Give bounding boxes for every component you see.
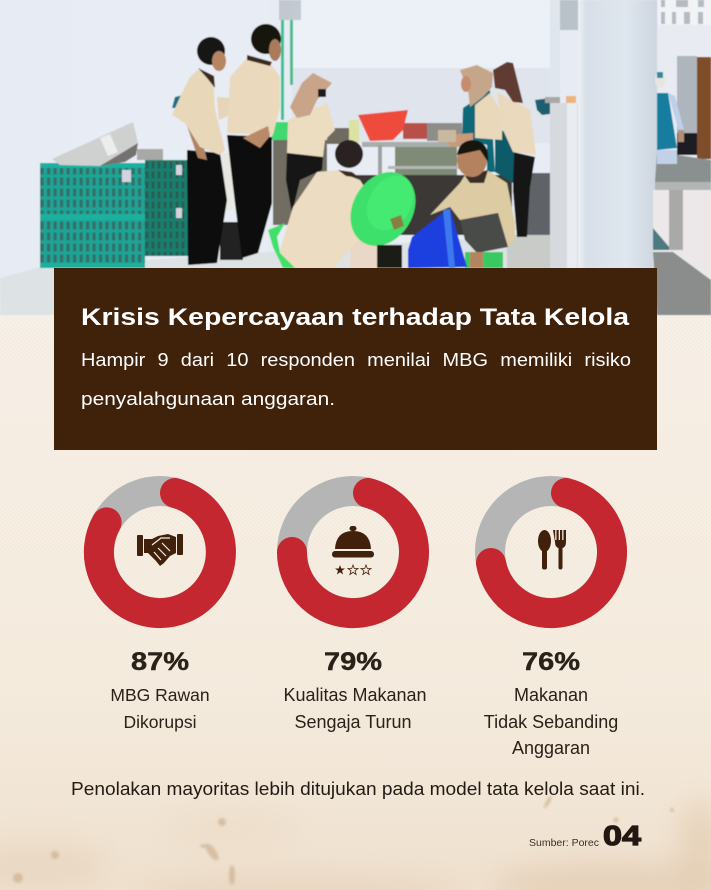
woman 1 — [286, 73, 335, 213]
green bowl behind — [272, 122, 289, 140]
photo: kitchen workers washing equipment — [0, 0, 711, 315]
donut: 87% — [99, 491, 221, 613]
panel description — [81, 350, 631, 409]
donut: 76% — [490, 491, 612, 613]
crouching man right — [430, 140, 515, 268]
sink — [327, 110, 463, 185]
stat: 76%: 76% — [522, 648, 580, 676]
teal cap — [172, 95, 183, 108]
stat: 76%: Anggaran — [512, 738, 590, 758]
metal basin — [52, 122, 163, 166]
paper background — [0, 300, 711, 890]
person behind — [217, 97, 243, 260]
green basin small — [268, 223, 295, 268]
stat: 87%: Dikorupsi — [124, 712, 196, 732]
teal bag on hook — [535, 98, 550, 115]
closing statement: Penolakan mayoritas lebih ditujukan pada model tata kelola saat ini. — [71, 779, 645, 799]
crates — [40, 160, 191, 268]
stat: 76%: Tidak Sebanding — [484, 712, 618, 732]
photo background walls and floor — [0, 0, 711, 315]
header panel — [54, 268, 657, 450]
bucket — [377, 245, 402, 268]
woman 2 — [438, 65, 502, 172]
icon: handshake — [137, 534, 183, 566]
stat: 87%: MBG Rawan — [110, 685, 210, 705]
stat: 79%: Kualitas Makanan — [283, 685, 427, 705]
man 1 standing — [172, 37, 227, 265]
stat: 79%: 79% — [324, 648, 382, 676]
panel description: Hampir 9 dari 10 responden menilai MBG memiliki risiko — [81, 350, 631, 370]
icon: spoon and fork — [538, 530, 566, 570]
person in background right — [655, 72, 684, 164]
icon: cloche with stars — [332, 526, 374, 574]
man 2 standing — [227, 24, 281, 258]
stat: 76%: Makanan — [514, 685, 588, 705]
blue basin — [408, 209, 467, 268]
heading: Krisis Kepercayaan terhadap Tata Kelola — [81, 304, 629, 331]
stat: 76% — [484, 648, 618, 758]
stat: 87% — [110, 648, 210, 732]
stat: 79%: Sengaja Turun — [294, 712, 412, 732]
stat: 87%: 87% — [131, 648, 189, 676]
green basin large — [338, 160, 428, 258]
crouching man left — [280, 140, 387, 268]
woman 3 — [493, 62, 536, 237]
stat: 79% — [283, 648, 427, 732]
panel description: penyalahgunaan anggaran. — [81, 389, 335, 409]
donut: 79% — [292, 491, 414, 613]
green pipes — [281, 20, 293, 120]
page number: 04 — [603, 820, 642, 851]
source: Sumber: Porec — [529, 838, 599, 849]
